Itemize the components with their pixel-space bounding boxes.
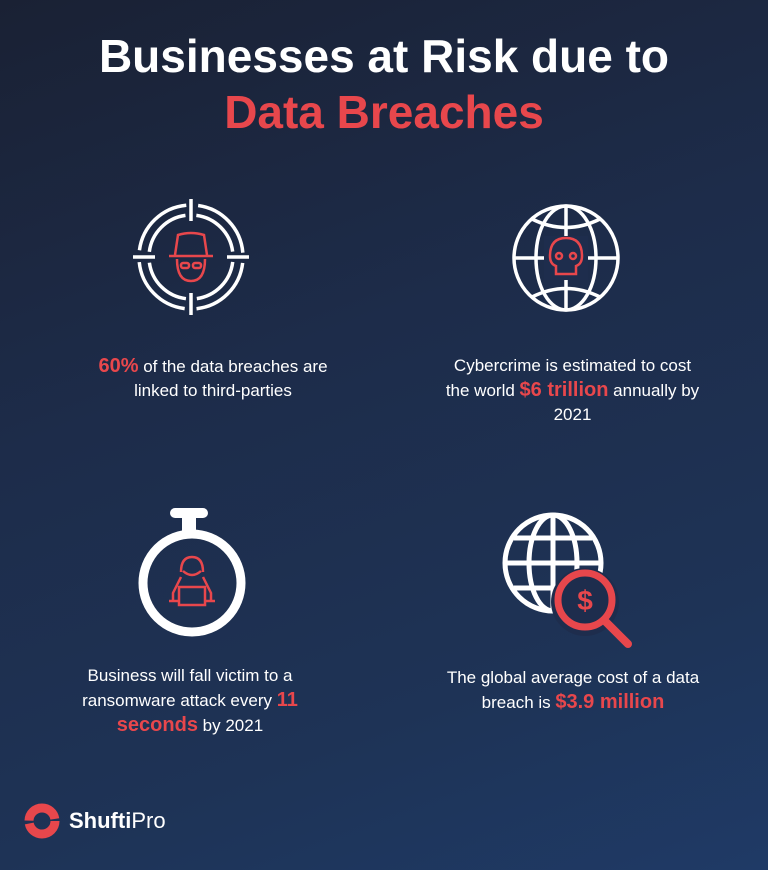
text: ransomware: Business will fall victim to a ransomware attack every 11 seconds by 2021 [82, 666, 298, 736]
icon: target hacker [133, 199, 249, 315]
title [99, 30, 669, 138]
text: cybercrime: Cybercrime is estimated to cost [454, 356, 691, 375]
text: average cost: The global average cost of a data breach is $3.9 million [447, 668, 699, 713]
text: cybercrime: the world $6 trillion annually by 2021 [446, 379, 699, 424]
icon: globe skull [512, 204, 620, 312]
text: cybercrime [446, 356, 700, 424]
icon: globe magnifier: $ [577, 585, 593, 616]
logo: ShuftiPro [69, 808, 166, 833]
text: 60%: 60% of the data breaches are linked to third-parties [98, 355, 328, 400]
icon: stopwatch hacker [138, 508, 246, 636]
title: Businesses at Risk due to [99, 30, 669, 82]
icon: globe magnifier [502, 512, 632, 648]
title: Data Breaches [224, 86, 544, 138]
logo [24, 804, 166, 838]
